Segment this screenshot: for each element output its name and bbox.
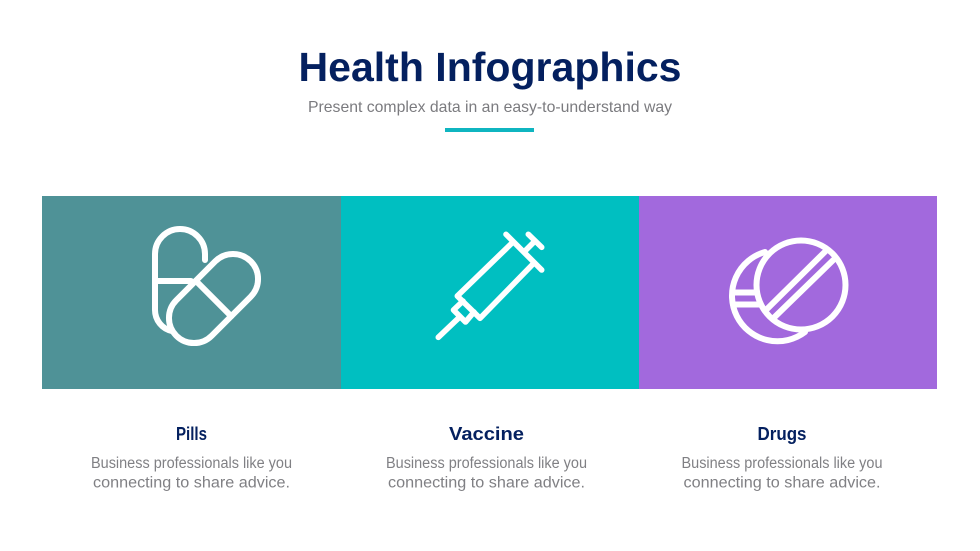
icon: syringe — [438, 234, 542, 337]
icon: pills — [155, 229, 258, 343]
column: drugs — [682, 424, 882, 492]
icon: tablets — [732, 240, 846, 341]
text: vaccine description — [386, 455, 587, 492]
text: drugs description — [682, 455, 882, 492]
subtitle: Present complex data in an easy-to-understand way — [308, 99, 672, 116]
text: drugs description: connecting to share advice. — [684, 474, 880, 492]
panel: drugs — [639, 196, 937, 389]
text: pills description — [91, 455, 292, 492]
heading: pills: Pills — [176, 424, 207, 444]
text: pills description: connecting to share advice. — [93, 474, 290, 492]
text: pills description: Business professionals like you — [91, 455, 292, 472]
column: pills — [91, 424, 292, 492]
title underline accent — [445, 128, 534, 132]
panel: pills — [42, 196, 341, 389]
title: Health Infographics — [298, 44, 682, 90]
text: drugs description: Business professionals like you — [682, 455, 882, 472]
heading: vaccine: Vaccine — [449, 424, 524, 444]
column: vaccine — [386, 424, 587, 492]
text: vaccine description: connecting to share advice. — [388, 474, 585, 492]
text: vaccine description: Business professionals like you — [386, 455, 587, 472]
heading: drugs: Drugs — [758, 424, 806, 444]
panel: vaccine — [341, 196, 639, 389]
